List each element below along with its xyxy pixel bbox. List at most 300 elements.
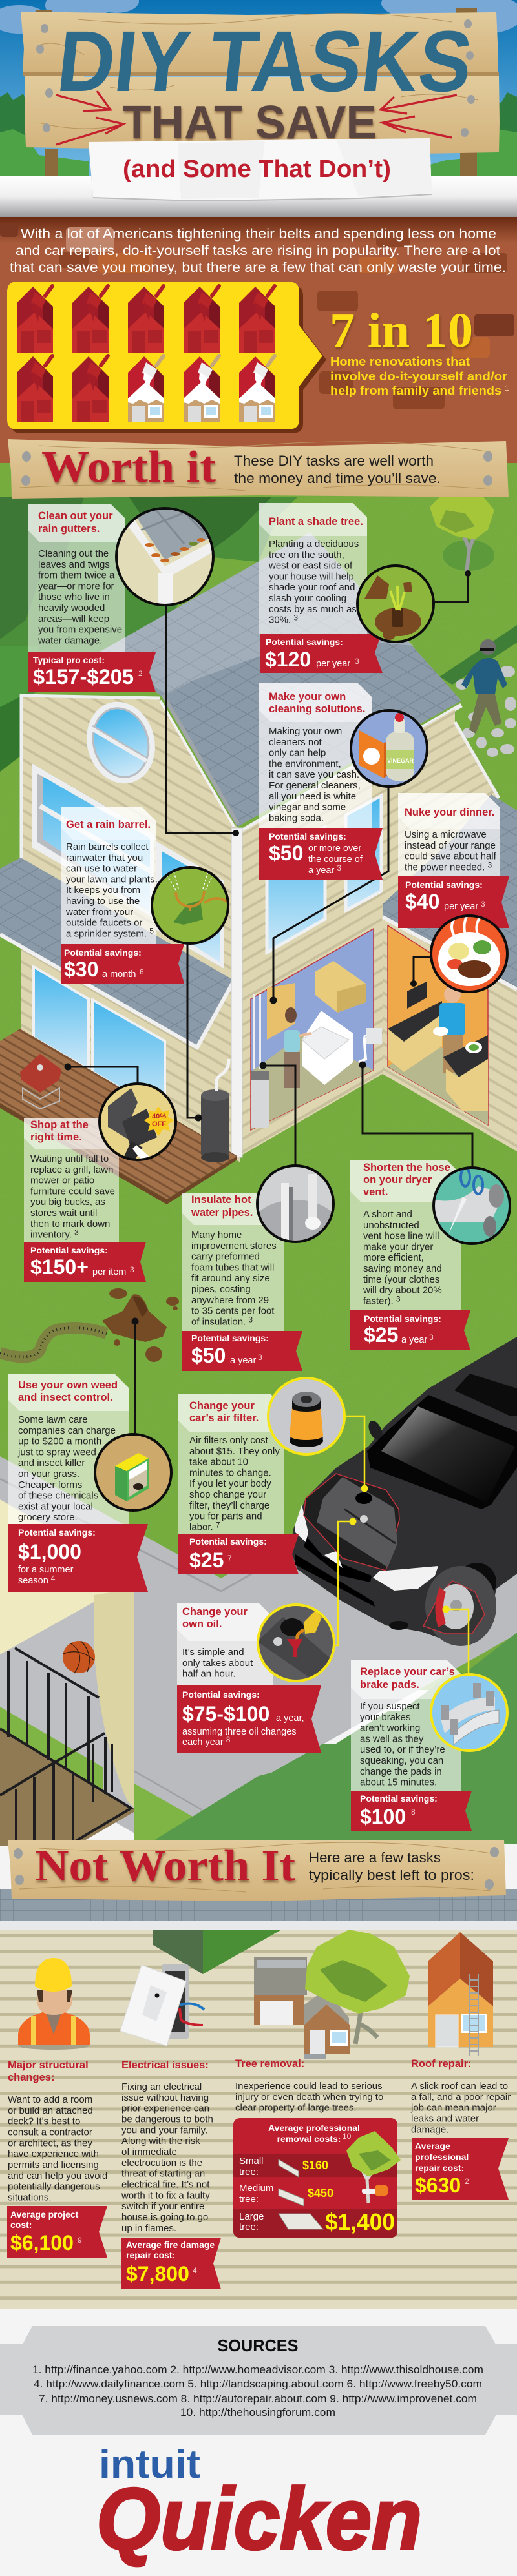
worth it sign: [8, 439, 509, 499]
panel: insulate hot water pipes: [182, 1193, 302, 1371]
column title: changes:: [8, 2072, 54, 2083]
panel: cleaning solutions: [259, 683, 383, 880]
panel: nuke your dinner: [398, 793, 509, 928]
panel body: to 35 cents per foot: [191, 1306, 275, 1317]
savings ribbon: 8: [411, 1808, 416, 1817]
panel title: Replace your car’s: [360, 1666, 455, 1678]
savings ribbon: 3: [337, 863, 341, 872]
panel body: It’s simple and: [182, 1647, 244, 1658]
panel body: filter, they’ll charge: [189, 1500, 269, 1511]
icon: red house 5: [239, 286, 275, 353]
panel body: your lawn and plants.: [66, 874, 158, 885]
panel body: make your dryer: [363, 1241, 433, 1252]
savings ribbon: [61, 944, 184, 984]
sky background: [0, 0, 517, 187]
panel body: unobstructed: [363, 1220, 419, 1231]
sources heading: SOURCES: [217, 2336, 299, 2355]
savings ribbon: assuming three oil changes: [182, 1727, 297, 1737]
panel title: car’s air filter.: [189, 1412, 258, 1424]
cost ribbon: [121, 2238, 221, 2289]
cost ribbon: 4: [193, 2266, 197, 2275]
panel body: can use to water: [66, 863, 137, 874]
savings ribbon: Potential savings:: [269, 831, 346, 841]
panel title: Change your: [189, 1400, 255, 1412]
panel body: If you suspect: [360, 1701, 420, 1712]
panel title: Plant a shade tree.: [269, 516, 363, 528]
row: small tree: [239, 2156, 328, 2178]
porch awning cream: [0, 1499, 134, 1654]
panel body: grocery store.: [18, 1512, 78, 1523]
circle icon: sapling planting: [357, 565, 434, 643]
savings ribbon: 3: [130, 1265, 134, 1274]
panel title: Use your own weed: [18, 1379, 118, 1391]
savings ribbon: Potential savings:: [18, 1527, 96, 1538]
row: medium tree: $450: [308, 2187, 333, 2200]
panel body: companies can charge: [18, 1425, 116, 1436]
column title: Electrical issues:: [121, 2059, 209, 2071]
panel title: Shop at the: [30, 1119, 89, 1131]
cabinets: [315, 961, 366, 1013]
savings ribbon: Potential savings:: [182, 1689, 260, 1700]
cost ribbon: $7,800: [126, 2262, 189, 2285]
panel body: shop change your: [189, 1489, 266, 1500]
savings ribbon: 3: [429, 1333, 434, 1342]
panel body: your house will help: [269, 571, 354, 582]
panel body: baking soda.: [269, 812, 324, 823]
savings ribbon: per year: [444, 902, 478, 912]
paper note: [89, 138, 432, 201]
railing: [0, 1648, 131, 1842]
savings ribbon: [24, 1242, 146, 1282]
savings ribbon: 3: [355, 657, 359, 666]
stat description: 1: [505, 384, 509, 393]
column body: issue without having: [121, 2092, 209, 2103]
column body: have experience with: [8, 2148, 99, 2159]
savings ribbon: $25: [364, 1323, 398, 1346]
cost ribbon: Average fire damage: [126, 2240, 215, 2250]
porch wall gray: [0, 1602, 127, 1842]
savings ribbon: 4: [51, 1574, 56, 1583]
circle icon: brake pads: [430, 1674, 508, 1751]
panel body: all you need is white: [269, 791, 356, 802]
panel body: 3: [487, 860, 492, 869]
circle icon: discounted grill: [99, 1083, 176, 1162]
icon: red house 7: [72, 356, 109, 422]
panel title: and insect control.: [18, 1392, 113, 1403]
panel body: 3: [396, 1294, 401, 1303]
savings ribbon: or more over: [308, 843, 361, 854]
panel body: from them twice a: [38, 570, 115, 581]
savings ribbon: Potential savings:: [360, 1793, 438, 1804]
headlights: [295, 1505, 438, 1591]
savings ribbon: [8, 1524, 148, 1592]
panel body: faster).: [363, 1295, 396, 1306]
column body: be dangerous to both: [121, 2114, 213, 2125]
panel title: brake pads.: [360, 1679, 419, 1691]
cost ribbon: $157-$205: [33, 665, 134, 688]
stat description: Home renovations that: [330, 355, 470, 368]
row: medium tree: Medium: [239, 2183, 273, 2194]
lower grille: [295, 1554, 375, 1607]
savings ribbon: the course of: [308, 854, 363, 865]
savings ribbon: Potential savings:: [189, 1536, 267, 1547]
panel body: Cleaning out the: [38, 548, 109, 559]
island: [443, 1035, 488, 1111]
counter: [388, 1001, 442, 1042]
panel body: up to $200 a month: [18, 1436, 101, 1447]
panel body: take about 10: [189, 1457, 248, 1468]
savings ribbon: $75-$100: [182, 1702, 269, 1726]
panel body: mower or patio: [30, 1175, 94, 1186]
row: large tree: $1,400: [325, 2209, 395, 2235]
windshield surround: [367, 1395, 517, 1509]
microwave: [407, 982, 427, 1009]
panel body: 3: [293, 613, 298, 623]
savings ribbon: Potential savings:: [405, 880, 483, 890]
savings ribbon: [182, 1331, 302, 1371]
panel title: Get a rain barrel.: [66, 819, 151, 830]
savings ribbon: $100: [360, 1805, 406, 1828]
panel body: foam tubes that will: [191, 1262, 274, 1273]
sale text: 40%: [152, 1113, 166, 1120]
savings ribbon: [260, 634, 383, 673]
panel body: half an hour.: [182, 1669, 236, 1680]
not worth it description: typically best left to pros:: [309, 1867, 474, 1883]
house: main roof: [99, 532, 461, 832]
column: tree removal: [233, 2058, 401, 2238]
lawn strip near driveway: [0, 1707, 194, 1842]
lower left roof: [0, 858, 234, 1047]
house: gable wall left: [21, 694, 240, 1162]
column body: and can help you avoid: [8, 2170, 107, 2181]
panel body: your brakes: [360, 1712, 410, 1723]
panel title: Insulate hot: [191, 1194, 251, 1206]
panel body: stores wait until: [30, 1208, 97, 1219]
icon: tree and chainsaw: [346, 2131, 401, 2203]
hanging lawn shape: [153, 1930, 280, 1974]
row: medium tree: [239, 2183, 333, 2206]
panel body: about 15 minutes.: [360, 1777, 437, 1788]
panel title: right time.: [30, 1131, 82, 1143]
sale burst: [144, 1106, 174, 1136]
panel body: year—or more for: [38, 581, 114, 592]
stat description: help from family and friends: [330, 384, 501, 397]
central windows: [267, 796, 381, 953]
panel body: areas—will keep: [38, 613, 109, 624]
panel body: tree on the south,: [269, 550, 344, 561]
panel body: labor.: [189, 1521, 216, 1532]
yellow car connector lines: [335, 1416, 469, 1674]
cost ribbon: repair cost:: [415, 2163, 464, 2173]
panel body: Air filters only cost: [189, 1435, 269, 1446]
panel body: and insect killer: [18, 1458, 85, 1468]
footer background: [0, 2309, 517, 2576]
savings ribbon: $150+: [30, 1255, 89, 1279]
circle icon: dryer hose and scissors: [433, 1167, 511, 1244]
hedge lower right: [151, 1633, 517, 1844]
panel body: just to spray weed: [17, 1447, 96, 1458]
column body: or architect, as they: [8, 2138, 92, 2148]
panel body: outside faucets or: [66, 918, 142, 929]
panel title: on your dryer: [363, 1174, 432, 1186]
panel body: slash your cooling: [269, 593, 346, 604]
column body: worth it to fix a faulty: [121, 2190, 210, 2201]
savings ribbon: $50: [269, 841, 303, 865]
savings ribbon: $120: [265, 648, 311, 671]
savings ribbon: 6: [140, 967, 144, 976]
icon: red house 6: [17, 356, 53, 422]
column body: house is going to go: [121, 2212, 208, 2223]
panel title: cleaning solutions.: [269, 703, 365, 715]
panel body: on your grass.: [18, 1468, 79, 1479]
yellow car connector dots: [349, 1485, 450, 1613]
cost ribbon: $630: [415, 2174, 461, 2197]
oval window: [78, 694, 164, 791]
panel body: the power needed.: [405, 861, 487, 872]
savings ribbon: 3: [258, 1353, 262, 1362]
washer: [302, 1011, 353, 1085]
row: small tree: Small: [239, 2156, 264, 2167]
row: small tree: $160: [302, 2159, 328, 2172]
icon: red house 1: [17, 286, 53, 353]
column body: Along with the risk: [121, 2136, 200, 2147]
anthill with ant trail: [0, 1288, 179, 1362]
panel title: rain gutters.: [38, 523, 100, 535]
siding background: [0, 1930, 517, 2309]
cost ribbon: Typical pro cost:: [33, 655, 105, 665]
column body: deck? It’s best to: [8, 2116, 80, 2127]
column body: prior experience can: [121, 2103, 209, 2114]
chart note: 10: [343, 2132, 352, 2141]
column body: A slick roof can lead to: [411, 2081, 508, 2092]
sources panel: [0, 2326, 517, 2435]
row: large tree: tree:: [239, 2221, 258, 2232]
panel body: Many home: [191, 1230, 242, 1241]
panel body: Some lawn care: [18, 1414, 88, 1425]
column body: Inexperience could lead to serious: [235, 2081, 383, 2092]
column body: clear property of large trees.: [235, 2103, 357, 2114]
curtain column: [94, 1589, 134, 1808]
column body: switch if your entire: [121, 2201, 204, 2212]
man with plate: [433, 986, 465, 1073]
dryer vent: [359, 1028, 382, 1062]
brick wall background: [0, 217, 517, 466]
panel body: furniture could save: [30, 1186, 115, 1197]
column body: situations.: [8, 2192, 52, 2203]
logo: Quicken: Quicken: [96, 2470, 422, 2568]
panel body: water from your: [65, 907, 133, 918]
cost ribbon: 2: [465, 2177, 469, 2186]
intro text: that can save you money, but there are a few that can only waste your time.: [10, 260, 506, 275]
panel body: fit around any size: [191, 1273, 270, 1284]
circle icon: gutter leaves: [113, 505, 216, 609]
panel: clean out gutters: [28, 504, 156, 692]
house: right wall: [383, 916, 517, 1151]
panel title: water pipes.: [191, 1207, 253, 1219]
panel body: carry preformed: [191, 1252, 260, 1262]
savings ribbon: $50: [191, 1344, 226, 1367]
chart heading: removal costs:: [277, 2134, 341, 2144]
panel body: those who live in: [38, 592, 110, 603]
basketball: [63, 1641, 95, 1673]
woman at washer: [284, 1007, 311, 1088]
circle icon: oil funnel: [257, 1604, 335, 1682]
closet: [267, 983, 295, 1040]
savings ribbon: [177, 1685, 321, 1753]
panel body: only can help: [269, 748, 326, 759]
nails: [36, 19, 475, 137]
panel: weed and insect control: [8, 1374, 148, 1592]
windshield glass: [381, 1406, 515, 1503]
column body: or build an attached: [8, 2105, 93, 2116]
panel body: used to, or if they’re: [360, 1744, 445, 1755]
savings ribbon: [350, 1310, 470, 1350]
stones path: [456, 666, 516, 770]
savings ribbon: [398, 876, 509, 928]
lawn background: [0, 463, 517, 1690]
panel body: vent hose line will: [363, 1231, 439, 1242]
savings ribbon: Potential savings:: [30, 1245, 108, 1255]
panel body: you from expensive: [38, 624, 122, 635]
panel body: costs by as much as: [269, 604, 357, 615]
panel body: 30%.: [269, 615, 293, 626]
savings ribbon: [178, 1534, 299, 1574]
column body: electrical fire. It’s not: [121, 2179, 210, 2190]
panel body: improvement stores: [191, 1241, 277, 1252]
column body: Want to add a room: [8, 2094, 92, 2105]
cost ribbon: professional: [415, 2152, 469, 2162]
column body: job can mean major: [410, 2103, 496, 2114]
panel body: then to mark down: [30, 1219, 110, 1230]
cost ribbon: [412, 2138, 509, 2200]
savings ribbon: 3: [481, 900, 485, 909]
panel body: instead of your range: [405, 840, 496, 851]
panel title: Make your own: [269, 691, 346, 703]
stat description: involve do-it-yourself and/or: [330, 369, 507, 383]
column body: electrocution is the: [121, 2158, 202, 2169]
sign posts: [36, 8, 477, 177]
panel body: pipes, costing: [191, 1284, 251, 1295]
bushes behind sign: [0, 92, 517, 176]
savings ribbon: per item: [92, 1267, 126, 1277]
water pipes: [251, 994, 269, 1128]
heading: Not Worth It: Not Worth It: [35, 1841, 295, 1891]
circle icon: sprinkler: [151, 867, 229, 944]
column: major structural changes: [7, 2059, 107, 2258]
panel body: of these chemicals: [18, 1490, 98, 1501]
panel body: aren’t working: [360, 1723, 420, 1734]
column body: consult a contractor: [8, 2127, 92, 2138]
cost ribbon: Average project: [10, 2209, 79, 2220]
cost ribbon: [28, 652, 156, 692]
icon: light switch with wires: [120, 1964, 204, 2046]
panel body: time (your clothes: [363, 1274, 439, 1285]
panel body: vinegar and some: [269, 802, 346, 813]
column body: threat of starting an: [121, 2169, 205, 2179]
panel body: water damage.: [37, 635, 102, 646]
panel: rain barrel: [61, 807, 184, 984]
clouds: [0, 0, 517, 34]
savings ribbon: a month: [102, 969, 136, 980]
savings ribbon: $40: [405, 890, 439, 913]
cost ribbon: $6,100: [10, 2231, 74, 2254]
icon: red house 4: [184, 286, 220, 353]
gutter band: [0, 176, 517, 217]
row: small tree: tree:: [239, 2167, 258, 2178]
lawn figure: shade tree: [430, 484, 494, 573]
wheel with brake cutaway: [423, 1563, 496, 1646]
house: central wall: [240, 709, 498, 1156]
panel: car air filter: [178, 1394, 299, 1574]
icon: red house 2: [72, 286, 109, 353]
circle icon: pipe insulation: [256, 1164, 335, 1243]
sun roof: [454, 1374, 517, 1416]
icon: white painted house 8: [128, 356, 164, 422]
cost ribbon: [7, 2206, 107, 2258]
savings ribbon: a year: [308, 865, 337, 876]
engine bay: [304, 1474, 399, 1571]
panel: change your oil: [177, 1603, 321, 1753]
panel title: Clean out your: [38, 510, 113, 522]
white fascia band: [0, 1921, 517, 1930]
panel body: shade your roof and: [269, 582, 355, 593]
column title: Roof repair:: [411, 2058, 472, 2070]
cost ribbon: cost:: [10, 2220, 32, 2230]
chart: tree removal costs: [233, 2118, 401, 2238]
savings ribbon: a year,: [276, 1713, 304, 1724]
intro text: With a lot of Americans tightening their belts and spending less on home: [21, 227, 496, 242]
column body: Fixing an electrical: [121, 2081, 202, 2092]
icon: barbecue grill on deck: [20, 1054, 61, 1109]
column body: injury or even death when trying to: [235, 2092, 383, 2103]
panel body: only takes about: [182, 1658, 253, 1669]
panel title: vent.: [363, 1186, 388, 1198]
title sign board: [21, 12, 500, 154]
panel body: squeaking, you can: [360, 1755, 443, 1766]
column body: leaks and water: [411, 2114, 479, 2125]
savings ribbon: $30: [64, 958, 98, 981]
panel title: own oil.: [182, 1618, 222, 1630]
savings ribbon: Potential savings:: [64, 947, 142, 958]
sources list: 10. http://thehousingforum.com: [180, 2406, 335, 2418]
red chalk arrows: [56, 91, 457, 145]
panel body: minutes to change.: [189, 1467, 271, 1478]
savings ribbon: Potential savings:: [364, 1314, 441, 1324]
column title: Major structural: [8, 2059, 89, 2071]
savings ribbon: per year: [316, 659, 350, 669]
panel body: inventory.: [30, 1230, 74, 1241]
nails: [21, 451, 492, 486]
lawn figure: man walking: [461, 639, 507, 734]
savings ribbon: $25: [189, 1549, 224, 1572]
panel body: cleaners not: [269, 737, 322, 748]
sources list: 1. http://finance.yahoo.com 2. http://www.homeadvisor.com 3. http://www.thisoldhouse.com: [32, 2364, 483, 2376]
stat: 7 in 10: 7 in 10: [330, 304, 473, 358]
sale text: OFF: [152, 1120, 166, 1128]
worth it description: the money and time you’ll save.: [234, 470, 441, 486]
panel: plant a shade tree: [259, 503, 383, 673]
panel body: replace a grill, lawn: [30, 1164, 113, 1175]
panel title: Change your: [182, 1606, 248, 1618]
icon: white painted house 10: [239, 356, 275, 422]
savings ribbon: [351, 1791, 472, 1831]
panel body: the environment,: [269, 758, 341, 769]
savings ribbon: Potential savings:: [191, 1333, 269, 1343]
column body: a fall, and a poor repair: [411, 2092, 511, 2103]
column body: you and your family.: [121, 2125, 207, 2136]
icon: red house 3: [128, 286, 164, 353]
worth it description: These DIY tasks are well worth: [234, 453, 434, 469]
